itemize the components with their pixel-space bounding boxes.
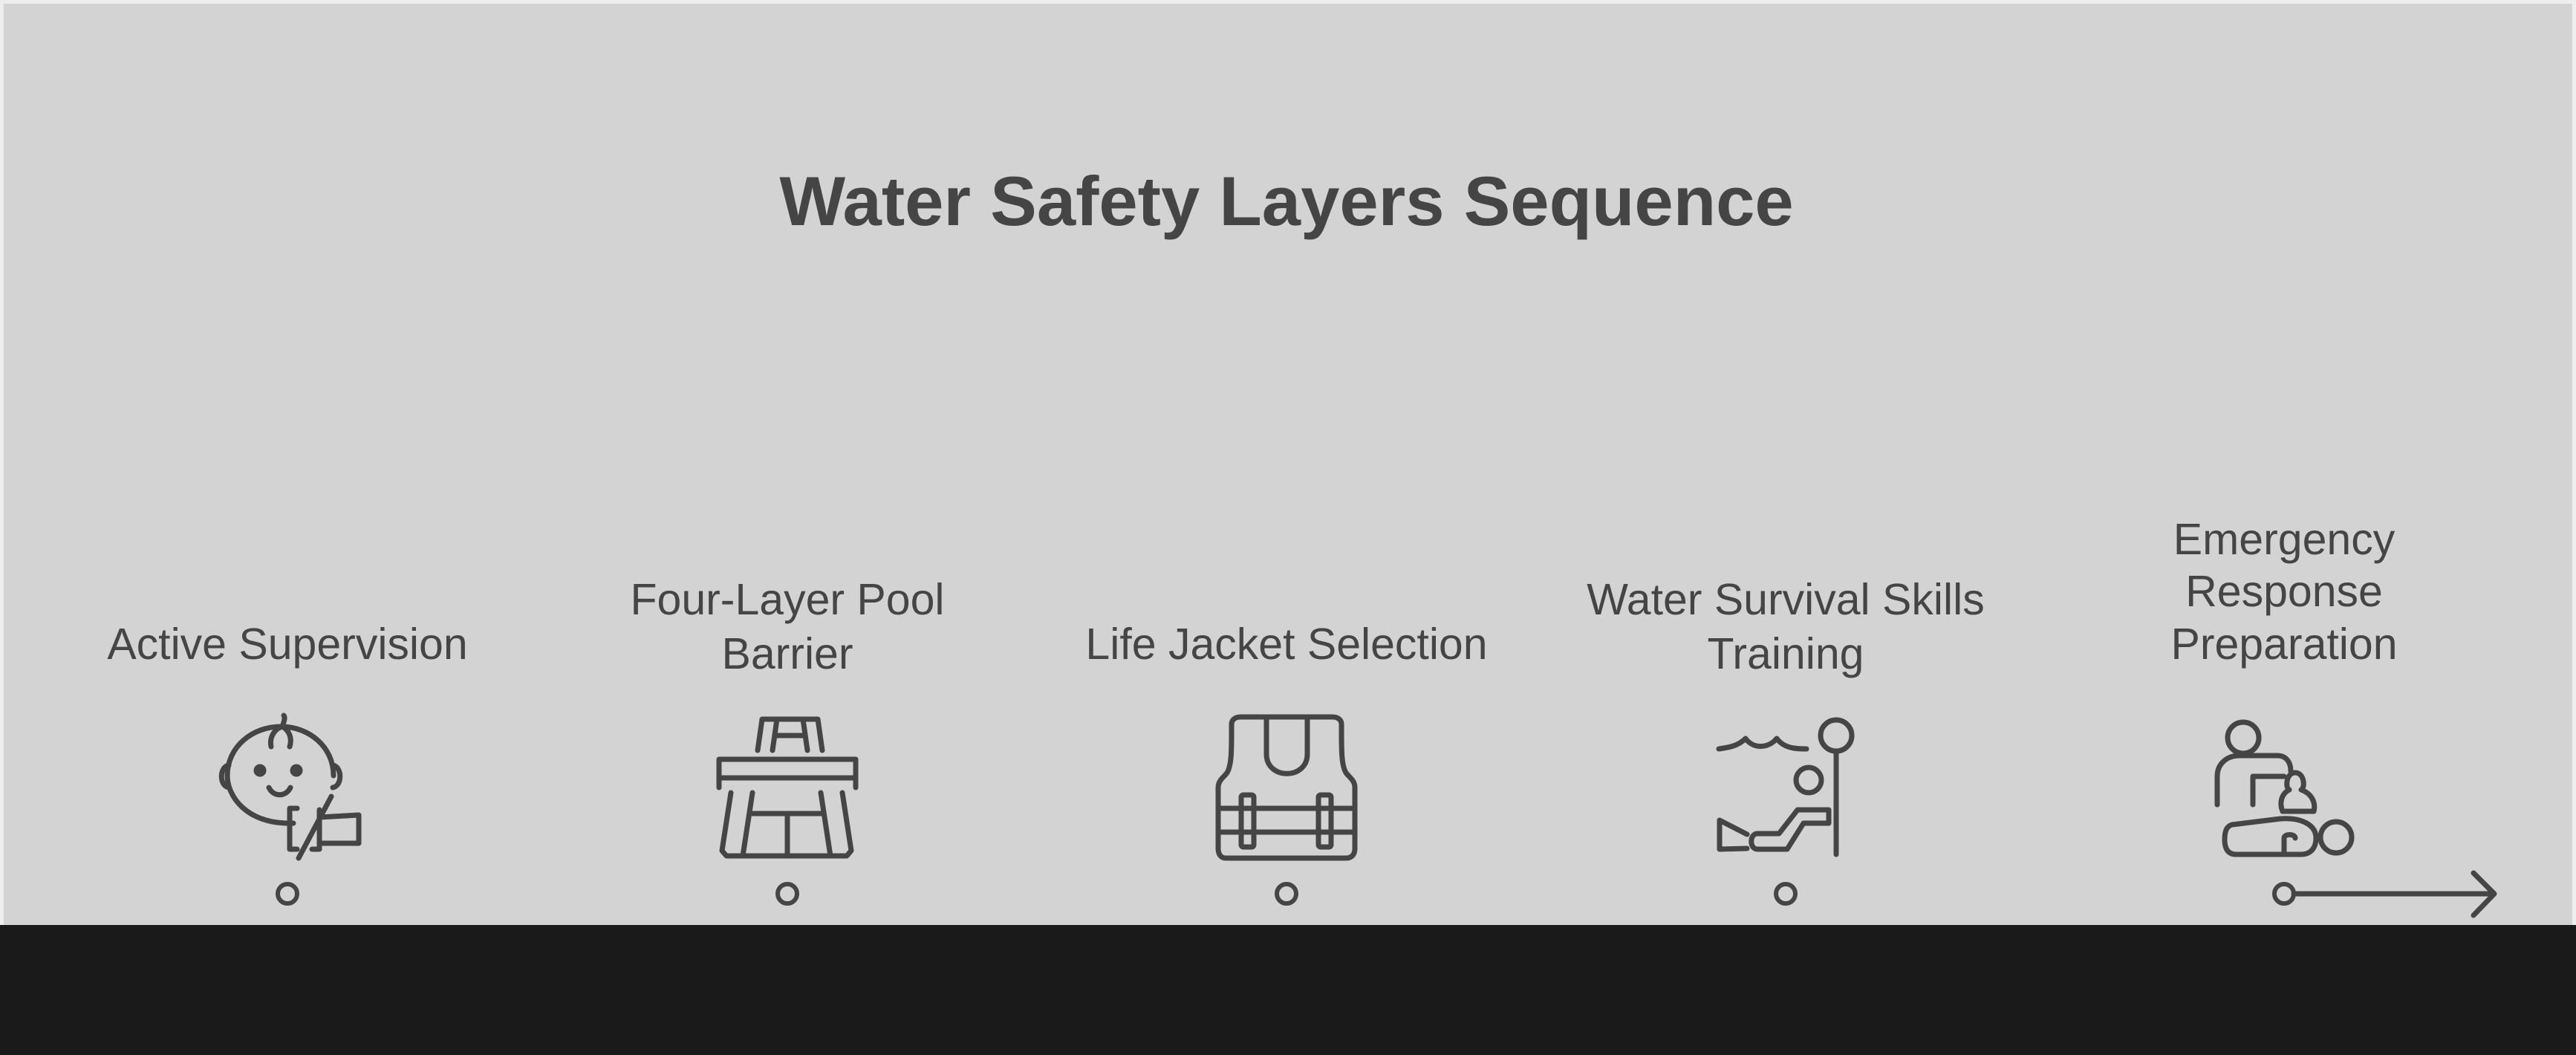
- label: Water Survival Skills Training: Training: [1708, 629, 1864, 678]
- label: Four-Layer Pool Barrier: Four-Layer Pool: [630, 575, 945, 624]
- label: Emergency Response Preparation: Emergency: [2173, 515, 2396, 564]
- marker: [1776, 884, 1795, 903]
- label: Active Supervision: Active Supervision: [107, 620, 468, 669]
- marker: [278, 884, 297, 903]
- step 3: Life Jacket Selection: [1085, 620, 1488, 903]
- label: Water Survival Skills Training: Water Survival Skills: [1587, 575, 1985, 624]
- step 2: Four-Layer Pool Barrier: [630, 575, 945, 903]
- icon: swimmer with pole: [1719, 720, 1852, 854]
- step 5: Emergency Response Preparation: [2170, 515, 2398, 903]
- icon: life jacket: [1218, 717, 1355, 858]
- icon: rescuer giving CPR: [2217, 722, 2352, 854]
- marker: [1277, 884, 1296, 903]
- marker: [778, 884, 797, 903]
- label: Emergency Response Preparation: Preparation: [2170, 620, 2398, 669]
- label: Emergency Response Preparation: Response: [2185, 567, 2383, 616]
- title: Water Safety Layers Sequence: [779, 162, 1794, 240]
- marker: [2274, 884, 2294, 903]
- icon: baby with bottle: [221, 715, 359, 858]
- arrow: [2294, 873, 2494, 915]
- label: Four-Layer Pool Barrier: Barrier: [721, 629, 853, 678]
- step 4: Water Survival Skills Training: [1587, 575, 1985, 903]
- step 1: Active Supervision: [107, 620, 468, 903]
- icon: pool barrier: [719, 719, 856, 856]
- label: Life Jacket Selection: Life Jacket Selection: [1085, 620, 1488, 669]
